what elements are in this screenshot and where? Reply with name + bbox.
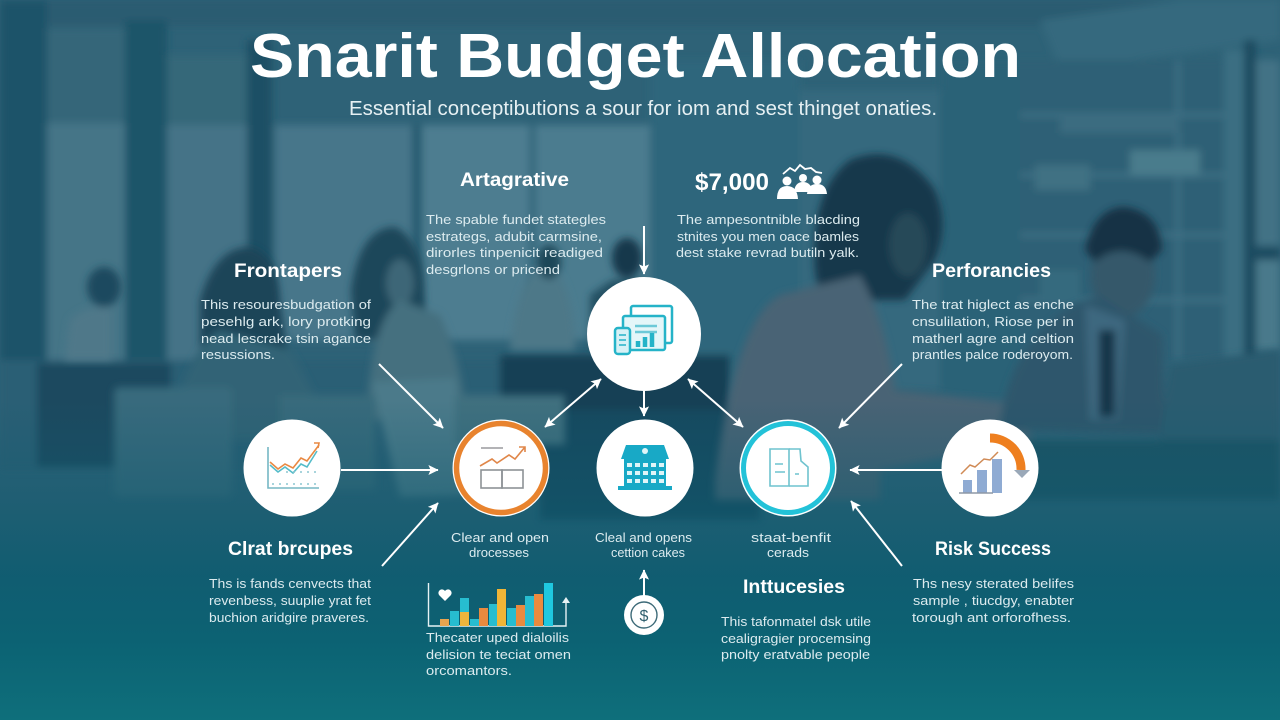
text block: Perforancies: matherl agre and celtion bbox=[912, 331, 1074, 346]
panel: Frontapers bbox=[201, 261, 371, 362]
icon: chart and boxes bbox=[480, 447, 525, 488]
panel: Perforancies bbox=[912, 261, 1074, 362]
icon: document bbox=[770, 449, 808, 486]
panel: Artagrative bbox=[426, 170, 607, 277]
icon: people group bbox=[777, 165, 827, 199]
text block: Artagrative: estrategs, adubit carmsine, bbox=[426, 229, 602, 244]
text block: Artagrative bbox=[426, 212, 607, 277]
caption: Clear and opens bbox=[595, 530, 693, 560]
text block: Perforancies bbox=[912, 297, 1074, 362]
heading: Artagrative: Artagrative bbox=[460, 170, 569, 191]
icon: bars and arc bbox=[959, 438, 1030, 493]
text block: $7,000: The ampesontnible blacding bbox=[677, 212, 860, 227]
caption: Clear and opens: Cleal and opens bbox=[595, 530, 693, 545]
text block: Frontapers: pesehlg ark, lory protking bbox=[201, 314, 371, 329]
icon: dashboard bbox=[615, 306, 672, 354]
caption: staat-benfit: cerads bbox=[767, 545, 810, 560]
text block: $7,000: stnites you men oace bamles bbox=[677, 229, 860, 244]
node: bank circle bbox=[596, 420, 694, 516]
text block: Inttucesies: cealigragier procemsing bbox=[721, 631, 871, 646]
text block: Artagrative: The spable fundet stategles bbox=[426, 212, 607, 227]
title: Snarit Budget Allocation bbox=[250, 22, 1021, 91]
caption: Clear and open: drocesses bbox=[469, 545, 530, 560]
node: top dashboard circle bbox=[587, 277, 701, 391]
text block: Artagrative: dirorles tinpenicit readiged bbox=[426, 245, 603, 260]
text block: Clrat brcupes: revenbess, suuplie yrat fet bbox=[209, 593, 371, 608]
node: cyan ring circle bbox=[740, 420, 836, 516]
node: orange ring circle bbox=[452, 420, 550, 516]
text block: $7,000 bbox=[676, 212, 860, 260]
panel: Inttucesies bbox=[721, 577, 871, 662]
panel: Risk Success bbox=[912, 539, 1075, 625]
icon: heart bbox=[438, 589, 452, 601]
text block: Perforancies: prantles palce roderoyom. bbox=[912, 347, 1073, 362]
icon: dollar coin bbox=[624, 595, 664, 635]
stat: $7,000: $7,000 bbox=[695, 169, 769, 196]
text block: Inttucesies bbox=[721, 614, 871, 662]
heading: Perforancies: Perforancies bbox=[932, 261, 1051, 282]
heading: Inttucesies: Inttucesies bbox=[743, 577, 845, 598]
text block: Clrat brcupes: buchion aridgire praveres. bbox=[209, 610, 369, 625]
text block: Clrat brcupes: Ths is fands cenvects that bbox=[209, 576, 371, 591]
text block: Perforancies: cnsulilation, Riose per in bbox=[912, 314, 1074, 329]
heading: Risk Success: Risk Success bbox=[935, 539, 1051, 560]
text block: Inttucesies: This tafonmatel dsk utile bbox=[721, 614, 871, 629]
text block: Theater uped: Thecater uped dialoilis bbox=[426, 630, 570, 645]
connector arrows bbox=[341, 226, 942, 596]
panel: Clrat brcupes bbox=[209, 539, 371, 625]
text block: Frontapers: nead lescrake tsin agance bbox=[201, 331, 371, 346]
text block: Risk Success bbox=[912, 576, 1075, 625]
subtitle: Essential conceptibutions a sour for iom and sest thinget onaties. bbox=[349, 98, 937, 120]
node: risk chart circle bbox=[942, 420, 1038, 516]
text block: Risk Success: torough ant orforofhess. bbox=[912, 610, 1071, 625]
caption: Clear and opens: cettion cakes bbox=[611, 545, 685, 560]
caption: Clear and open: Clear and open bbox=[451, 530, 549, 545]
text block: Perforancies: The trat higlect as enche bbox=[912, 297, 1074, 312]
icon: bank building bbox=[618, 445, 672, 490]
heading: Clrat brcupes: Clrat brcupes bbox=[228, 539, 353, 560]
text block: Frontapers: resussions. bbox=[201, 347, 275, 362]
text block: Inttucesies: pnolty eratvable people bbox=[721, 647, 870, 662]
text block: Risk Success: sample , tiucdgy, enabter bbox=[913, 593, 1075, 608]
text block: Theater uped: delision te teciat omen bbox=[426, 647, 571, 662]
text block: Theater uped: orcomantors. bbox=[426, 663, 512, 678]
text block: Frontapers bbox=[201, 297, 371, 362]
text block: Artagrative: desgrlons or pricend bbox=[426, 262, 560, 277]
node: trend chart circle bbox=[244, 420, 340, 516]
text block: $7,000: dest stake revrad butiln yalk. bbox=[676, 245, 859, 260]
text block: Risk Success: Ths nesy sterated belifes bbox=[913, 576, 1075, 591]
caption: staat-benfit: staat-benfit bbox=[751, 530, 831, 545]
panel: $7,000 bbox=[676, 165, 860, 260]
heading: Frontapers: Frontapers bbox=[234, 261, 342, 282]
caption: staat-benfit bbox=[751, 530, 831, 560]
caption: Clear and open bbox=[451, 530, 549, 560]
text block: Clrat brcupes bbox=[209, 576, 371, 625]
text block: Theater uped bbox=[426, 630, 571, 678]
bar chart bbox=[428, 583, 570, 626]
text block: Frontapers: This resouresbudgation of bbox=[201, 297, 371, 312]
icon: dollar coin: $ bbox=[640, 608, 649, 625]
icon: line chart bbox=[268, 443, 320, 488]
